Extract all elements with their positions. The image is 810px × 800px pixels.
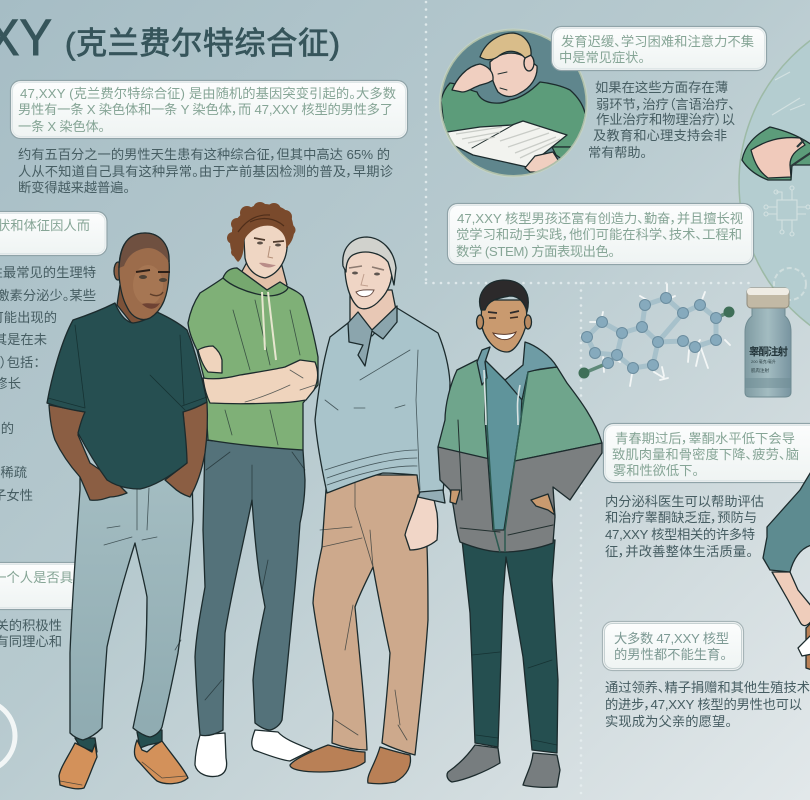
icon: testosterone vial xyxy=(745,288,791,397)
text block: prevalence: 约有五百分之一的男性天生患有这种综合征，但其中高达 65% 的 xyxy=(18,146,390,162)
callout: definition xyxy=(10,80,408,138)
callout text: strengths: 47,XXY 核型男孩还富有创造力、勤奋，并且擅长视 xyxy=(457,210,743,226)
icon: white ring (cropped) xyxy=(0,700,15,772)
text block: endocrinologist xyxy=(605,494,764,559)
sleeve xyxy=(742,127,810,180)
right arm xyxy=(165,402,207,497)
title: (克兰费尔特综合征) xyxy=(65,26,340,61)
text block: endocrinologist: 47,XXY 核型相关的许多特 xyxy=(605,526,755,542)
hair xyxy=(480,33,531,60)
icon: testosterone molecule xyxy=(578,284,734,386)
shoes xyxy=(195,733,227,777)
head xyxy=(345,242,392,309)
text block: physical traits (cropped): 稀疏 xyxy=(0,465,27,480)
scissors xyxy=(790,140,810,167)
callout: diagnosis (cropped) xyxy=(0,562,85,610)
book xyxy=(447,121,567,167)
neck xyxy=(117,285,162,325)
callout text: common symptoms: 中是常见症状。 xyxy=(559,50,645,65)
text block: fatherhood xyxy=(605,679,810,729)
shoes xyxy=(290,745,365,772)
callout text: definition xyxy=(18,85,396,134)
callout text: definition: 47,XXY (克兰费尔特综合征) 是由随机的基因突变引起的。大多数 xyxy=(20,85,396,101)
figure: older man in blue sweater xyxy=(290,237,450,784)
hood xyxy=(223,268,288,296)
text block: therapy: 常有帮助。 xyxy=(588,145,647,160)
text block: physical traits (cropped): ）包括： xyxy=(0,355,40,370)
callout: low testosterone effects xyxy=(604,424,810,482)
neck xyxy=(240,262,287,298)
text block: prevalence: 断变得越来越普遍。 xyxy=(18,179,130,195)
drawstrings xyxy=(262,292,276,360)
callout text: strengths: 数学 (STEM) 方面表现出色。 xyxy=(456,243,615,259)
icon: faint sketches xyxy=(772,72,805,115)
callout: strengths xyxy=(448,204,754,264)
figure: man with green hoodie xyxy=(188,202,318,777)
callout text: low testosterone effects: 青春期过后，睾酮水平低下会导 xyxy=(615,431,795,446)
text block: therapy: 如果在这些方面存在薄 xyxy=(595,79,728,95)
hair xyxy=(480,280,528,312)
callout text: common symptoms xyxy=(559,33,754,65)
callout text: strengths: 觉学习和动手实践，他们可能在科学、技术、工程和 xyxy=(456,227,742,242)
text block: physical traits (cropped) xyxy=(0,265,96,503)
socks xyxy=(75,738,97,752)
panel: large circle with hands and circuit icons xyxy=(738,40,810,326)
shoes xyxy=(59,743,97,789)
curly hair xyxy=(227,202,296,262)
face features xyxy=(349,266,384,270)
drawstrings xyxy=(484,370,520,425)
panel: boy reading circle xyxy=(440,29,590,177)
callout text: definition: 一条 X 染色体。 xyxy=(18,118,105,134)
icon: circuit chip xyxy=(764,186,810,236)
lower sleeve xyxy=(551,146,571,158)
icon: testosterone vial: 睾酮注射 xyxy=(749,345,788,358)
callout text: strengths xyxy=(456,210,743,259)
text block: endocrinologist: 和治疗睾酮缺乏症，预防与 xyxy=(605,510,757,525)
pants xyxy=(462,540,558,753)
figure: partial person at right edge xyxy=(763,470,810,670)
eye and mouth xyxy=(498,72,507,90)
face highlight xyxy=(133,265,163,305)
hand on forehead xyxy=(452,64,493,92)
inner shirt xyxy=(485,360,523,530)
collar xyxy=(348,306,397,366)
title xyxy=(0,9,340,66)
hand xyxy=(751,138,805,178)
t-shirt xyxy=(47,303,207,489)
callout text: common symptoms: 发育迟缓、学习困难和注意力不集 xyxy=(561,33,754,49)
face features xyxy=(136,270,170,272)
pants xyxy=(313,475,428,755)
callout text: definition: 男性有一条 X 染色体和一条 Y 染色体，而 47,XXY 核型的男性多了 xyxy=(18,101,393,117)
callout text: low testosterone effects xyxy=(612,431,799,478)
jeans xyxy=(70,470,193,740)
text block: physical traits (cropped): 的 xyxy=(1,421,14,436)
face features xyxy=(488,311,519,313)
head xyxy=(481,300,527,352)
figure: dark man in green t-shirt xyxy=(47,233,207,789)
hand xyxy=(405,495,438,550)
ear xyxy=(524,55,534,71)
shoes xyxy=(447,745,500,782)
hair xyxy=(119,233,169,268)
face xyxy=(490,53,537,97)
callout: fertility xyxy=(602,622,744,670)
arm xyxy=(772,572,810,626)
text block: therapy: 作业治疗和物理治疗）以 xyxy=(596,112,735,127)
face xyxy=(244,224,287,278)
sweater xyxy=(442,81,585,148)
dotted section dividers xyxy=(426,2,752,800)
eyes and mouth xyxy=(254,238,284,242)
callout text: fertility xyxy=(614,630,729,662)
zip lines xyxy=(486,372,528,552)
left arm xyxy=(49,405,127,500)
shoe xyxy=(798,634,810,656)
text block: fatherhood: 的进步，47,XXY 核型的男性也可以 xyxy=(605,697,802,712)
icon: testosterone vial: 200 毫克/毫升 xyxy=(751,358,776,364)
ear xyxy=(114,262,122,280)
sleeve xyxy=(763,470,810,572)
sweater xyxy=(315,308,450,497)
icon: gear xyxy=(774,268,806,300)
callout text: fertility: 的男性都不能生育。 xyxy=(614,647,727,662)
text block: prevalence xyxy=(18,146,394,195)
icon: testosterone vial: 肌肉注射 xyxy=(751,367,769,374)
text block: therapy xyxy=(588,79,735,160)
right hand in pocket xyxy=(531,494,555,515)
leg xyxy=(806,622,810,670)
text block: fatherhood: 实现成为父亲的愿望。 xyxy=(605,714,732,729)
crossed arms xyxy=(203,360,318,404)
cuff xyxy=(418,490,445,503)
hoodie xyxy=(188,268,318,450)
pants xyxy=(195,440,305,736)
left hand xyxy=(198,346,222,373)
text block: fatherhood: 通过领养、精子捐赠和其他生殖技术 xyxy=(605,679,810,695)
hair xyxy=(343,237,396,285)
text block: therapy: 及教育和心理支持会非 xyxy=(593,128,727,143)
jacket grey lower xyxy=(438,443,602,552)
jacket green upper xyxy=(438,360,602,462)
text block: therapy: 弱环节，治疗（言语治疗、 xyxy=(596,97,735,112)
left hand xyxy=(450,490,460,504)
callout text: low testosterone effects: 雾和性欲低下。 xyxy=(613,463,699,478)
text block: endocrinologist: 征，并改善整体生活质量。 xyxy=(605,544,753,559)
text block: endocrinologist: 内分泌科医生可以帮助评估 xyxy=(605,494,764,509)
callout: common symptoms xyxy=(552,26,766,70)
ears xyxy=(476,315,484,329)
text block: prevalence: 人从不知道自己具有这种异常。由于产前基因检测的普及，早期诊 xyxy=(18,163,394,179)
callout text: low testosterone effects: 致肌肉量和骨密度下降、疲劳、脑 xyxy=(612,446,799,462)
figure: teen in green and grey hoodie xyxy=(438,280,602,787)
neck xyxy=(350,290,396,330)
text block: positive traits (cropped) xyxy=(0,618,62,649)
callout: symptoms vary (cropped) xyxy=(0,212,107,256)
callout text: fertility: 大多数 47,XXY 核型 xyxy=(614,630,729,646)
lower hand xyxy=(525,152,560,172)
head xyxy=(119,233,169,320)
hood xyxy=(477,347,490,385)
